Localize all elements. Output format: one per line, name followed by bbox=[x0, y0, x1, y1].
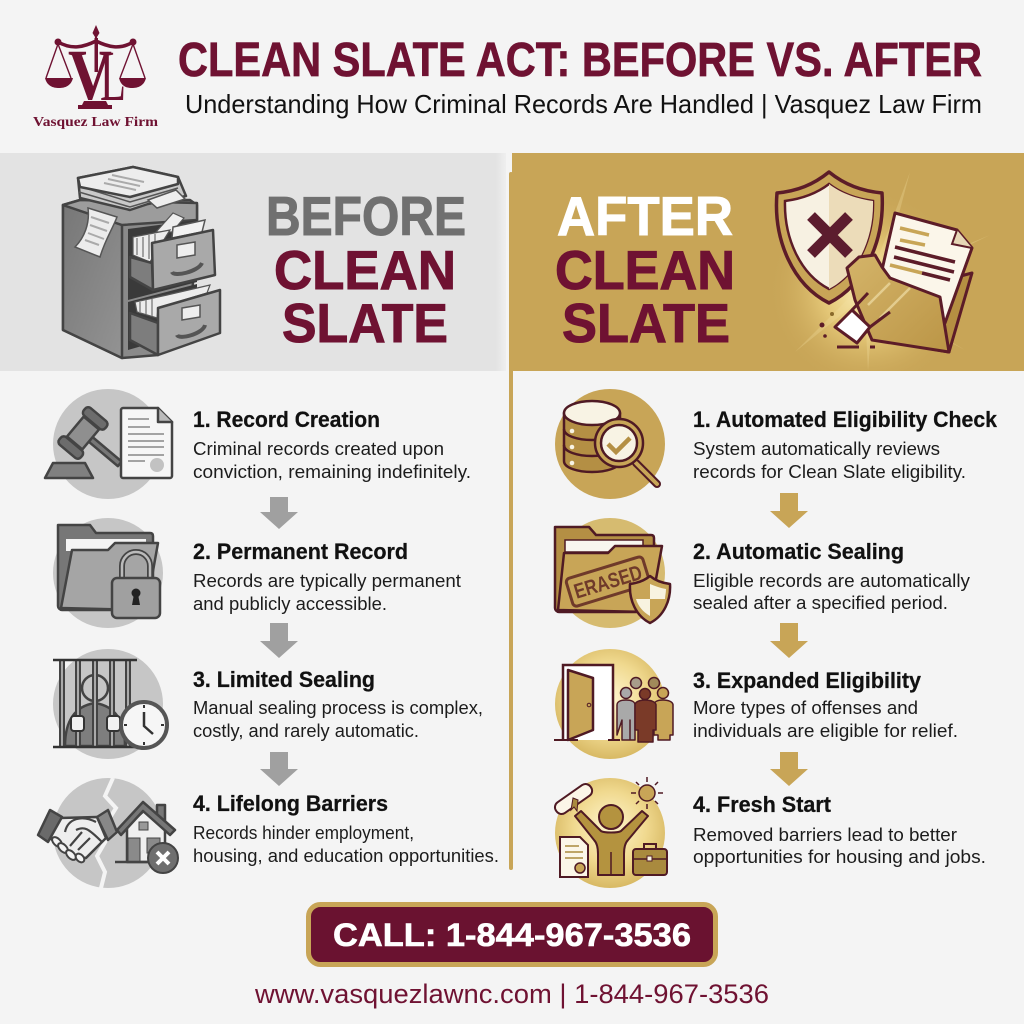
text: conviction, remaining indefinitely. bbox=[193, 461, 471, 482]
icon: overflowing filing cabinet bbox=[63, 167, 220, 358]
text: records for Clean Slate eligibility. bbox=[693, 461, 966, 482]
arrow bbox=[770, 493, 808, 528]
text: 1. Automated Eligibility Check bbox=[693, 407, 998, 432]
text: 1. Record Creation bbox=[193, 407, 380, 432]
icon: person behind bars with clock bbox=[53, 649, 167, 759]
icon: broken handshake and house bbox=[38, 778, 178, 888]
icon: folder with padlock bbox=[53, 518, 163, 628]
text: 2. Permanent Record bbox=[193, 539, 408, 564]
step: after 2 automatic sealing bbox=[555, 518, 971, 628]
text: housing, and education opportunities. bbox=[193, 845, 499, 866]
text: Records hinder employment, bbox=[193, 822, 414, 843]
icon: erased folder with shield: ERASED bbox=[571, 561, 645, 604]
text: 3. Expanded Eligibility bbox=[693, 668, 922, 693]
heading: after clean slate: SLATE bbox=[562, 292, 730, 354]
text bbox=[693, 668, 958, 741]
text: Eligible records are automatically bbox=[693, 570, 971, 591]
text: 4. Lifelong Barriers bbox=[193, 791, 388, 816]
logo: Vasquez Law Firm scales: L bbox=[100, 36, 126, 116]
call to action button: CALL: 1-844-967-3536 bbox=[333, 917, 691, 953]
heading: before clean slate: BEFORE bbox=[266, 185, 466, 247]
call to action button bbox=[308, 904, 716, 964]
step: before 3 limited sealing bbox=[53, 649, 483, 759]
logo: Vasquez Law Firm scales bbox=[33, 25, 158, 130]
step: before 1 record creation bbox=[45, 389, 471, 499]
text: costly, and rarely automatic. bbox=[193, 720, 419, 741]
text: Records are typically permanent bbox=[193, 570, 461, 591]
text: 3. Limited Sealing bbox=[193, 667, 375, 692]
logo: Vasquez Law Firm scales: Vasquez Law Firm bbox=[33, 115, 158, 130]
step: before 2 permanent record bbox=[53, 518, 461, 628]
arrow bbox=[260, 623, 298, 658]
text: sealed after a specified period. bbox=[693, 592, 948, 613]
icon: database with magnifier bbox=[555, 389, 665, 499]
arrow bbox=[770, 752, 808, 786]
heading: after clean slate: CLEAN bbox=[555, 239, 735, 301]
panel: after header bbox=[512, 153, 1024, 390]
icon: gavel and document bbox=[45, 389, 172, 499]
icon: erased folder with shield bbox=[555, 518, 670, 628]
text: Manual sealing process is complex, bbox=[193, 697, 483, 718]
text bbox=[693, 792, 986, 867]
icon: open door and group of people bbox=[554, 649, 673, 759]
arrow bbox=[260, 497, 298, 529]
step: after 3 expanded eligibility bbox=[554, 649, 958, 759]
heading: before clean slate: SLATE bbox=[282, 292, 448, 354]
text: System automatically reviews bbox=[693, 438, 940, 459]
arrow bbox=[770, 623, 808, 658]
heading: after clean slate: AFTER bbox=[557, 185, 733, 247]
heading: before clean slate bbox=[266, 185, 466, 354]
text: 4. Fresh Start bbox=[693, 792, 832, 817]
heading: after clean slate bbox=[555, 185, 735, 354]
arrow bbox=[260, 752, 298, 786]
text bbox=[693, 539, 971, 613]
text bbox=[193, 667, 483, 741]
text: More types of offenses and bbox=[693, 697, 918, 718]
text: 2. Automatic Sealing bbox=[693, 539, 904, 564]
subtitle: Understanding How Criminal Records Are Handled | Vasquez Law Firm bbox=[185, 89, 982, 119]
text bbox=[693, 407, 998, 482]
step: after 4 fresh start bbox=[553, 777, 986, 888]
text: individuals are eligible for relief. bbox=[693, 720, 958, 741]
text: Removed barriers lead to better bbox=[693, 824, 957, 845]
step: before 4 lifelong barriers bbox=[38, 778, 499, 888]
text bbox=[193, 539, 461, 614]
icon: shield, document, folder and eraser bbox=[774, 170, 988, 370]
text: Criminal records created upon bbox=[193, 438, 444, 459]
text bbox=[193, 407, 471, 482]
icon: person with diploma, sun, certificate and briefcase bbox=[553, 777, 667, 888]
text bbox=[193, 791, 499, 866]
text: and publicly accessible. bbox=[193, 593, 387, 614]
heading: before clean slate: CLEAN bbox=[274, 239, 456, 301]
text: opportunities for housing and jobs. bbox=[693, 846, 986, 867]
panel: before header bbox=[0, 153, 506, 371]
step: after 1 automated eligibility check bbox=[555, 389, 998, 499]
footer contact line: www.vasquezlawnc.com | 1-844-967-3536 bbox=[254, 979, 769, 1009]
logo: Vasquez Law Firm scales: V bbox=[68, 35, 112, 115]
